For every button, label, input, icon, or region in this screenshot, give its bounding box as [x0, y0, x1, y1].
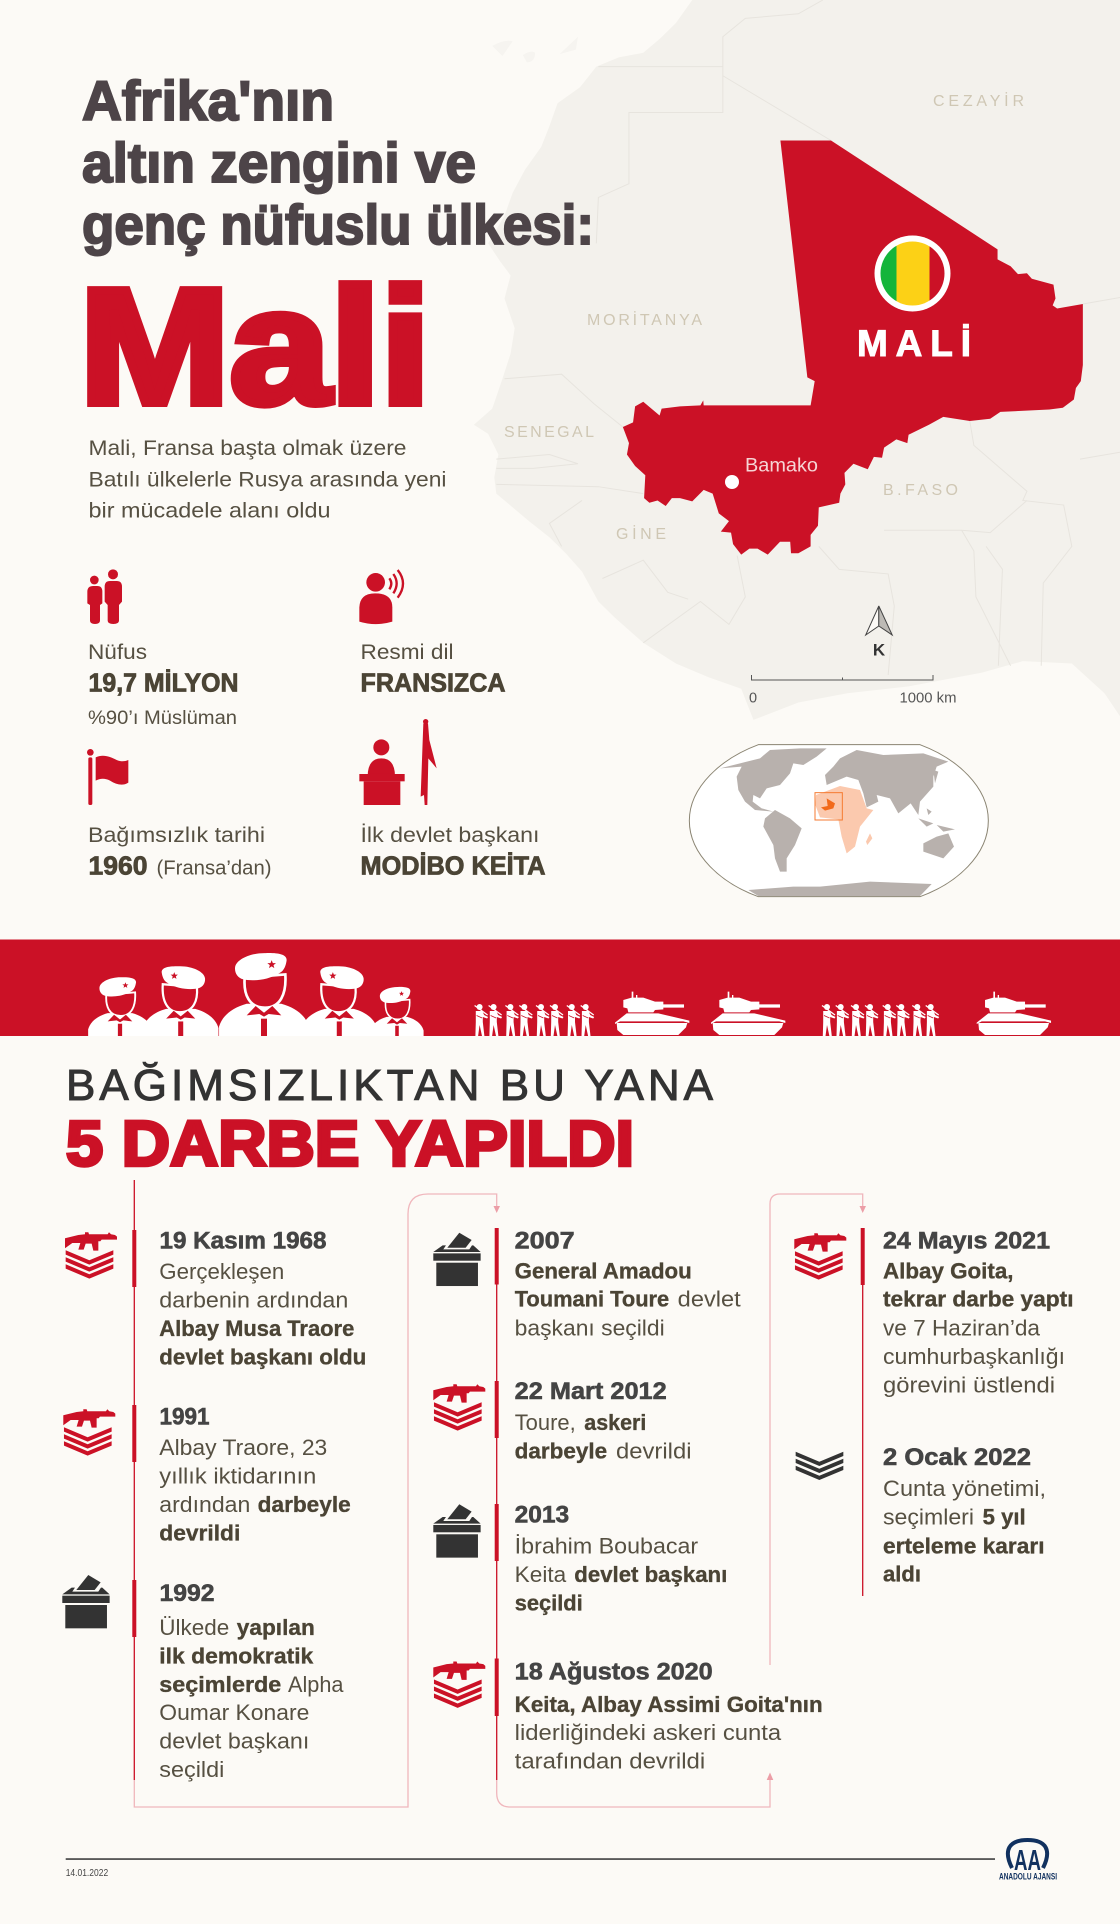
- column 1: event 1991: yıllık iktidarının: [159, 1464, 316, 1489]
- column 1: event 1991: Albay Traore, 23: [159, 1435, 327, 1460]
- column 2: event 2012: darbeyle: [515, 1438, 607, 1463]
- icon: chevrons: [796, 1452, 843, 1480]
- column 1: event 1992: Alpha: [288, 1672, 344, 1697]
- icon: ballot box: [433, 1233, 481, 1286]
- icon: coup: [63, 1409, 115, 1456]
- column 3: event 2022: Cunta yönetimi,: [883, 1476, 1046, 1501]
- column 3: event 2021: tekrar darbe yaptı: [883, 1287, 1074, 1312]
- stat: population: [88, 641, 238, 729]
- date: 14.01.2022: [66, 1867, 108, 1879]
- world locator map: [689, 745, 988, 897]
- column 3: event 2021: 24 Mayıs 2021: [883, 1227, 1050, 1254]
- column 2: event 2020: Keita, Albay Assimi Goita'nın: [515, 1692, 823, 1717]
- intro paragraph: bir mücadele alanı oldu: [88, 500, 330, 522]
- column 2: event 2012: [433, 1378, 692, 1463]
- stat: independence: [88, 824, 272, 880]
- icon: president at podium with flag: [359, 719, 437, 805]
- column 1: event 1992: seçildi: [159, 1757, 224, 1782]
- intro paragraph: Mali, Fransa başta olmak üzere: [88, 437, 406, 460]
- column 2: event 2020: [433, 1658, 823, 1773]
- column 1: event 1992: [62, 1575, 344, 1782]
- map labels: B.FASO: [883, 482, 958, 499]
- junta officers: [88, 953, 424, 1036]
- column 1: event 1992: Ülkede: [159, 1615, 229, 1640]
- icon: ballot box: [433, 1504, 481, 1558]
- title: subtitle lines: altın zengini ve: [82, 131, 476, 194]
- title: subtitle lines: Afrika'nın: [82, 69, 334, 132]
- column 3: event 2022: 2 Ocak 2022: [883, 1444, 1031, 1471]
- column 2: event 2013: İbrahim Boubacar: [515, 1533, 698, 1558]
- capital marker: Bamako: Bamako: [745, 454, 818, 476]
- column 3: event 2022: [796, 1444, 1046, 1587]
- column 2: event 2013: 2013: [515, 1501, 569, 1528]
- column 1: event 1968: [65, 1227, 366, 1369]
- icon: coup: [433, 1384, 485, 1431]
- logo: Anadolu Ajansi: ANADOLU AJANSI: [999, 1872, 1057, 1882]
- map: West Africa base: [474, 0, 1120, 720]
- map labels: SENEGAL: [504, 424, 594, 441]
- footer rule: [66, 1858, 995, 1860]
- map: Mali country shape: [623, 140, 1083, 555]
- column 1: event 1992: Oumar Konare: [159, 1700, 309, 1725]
- column 2: event 2020: 18 Ağustos 2020: [515, 1658, 713, 1685]
- column 1: event 1992: devlet başkanı: [159, 1729, 309, 1754]
- title: Mali: Mali: [80, 255, 430, 438]
- icon: Mali flag: [874, 236, 950, 312]
- tanks: [615, 992, 1051, 1035]
- logo: Anadolu Ajansi: [999, 1840, 1057, 1882]
- map labels: CEZAYİR: [933, 91, 1024, 110]
- stat: first president: İlk devlet başkanı: [360, 824, 540, 847]
- stat: official language: [360, 641, 506, 698]
- stat: independence: 1960: [88, 850, 148, 880]
- column 2: event 2007: Toumani Toure: [515, 1287, 669, 1312]
- column 3: event 2021: Albay Goita,: [883, 1258, 1014, 1283]
- intro paragraph: [88, 437, 446, 522]
- column 3: event 2022: 5 yıl: [983, 1505, 1026, 1530]
- column 3: event 2022: erteleme kararı: [883, 1533, 1044, 1558]
- stat: population: Nüfus: [88, 641, 147, 664]
- title: subtitle lines: [82, 69, 594, 256]
- stat: first president: [360, 824, 546, 880]
- stat: official language: Resmi dil: [360, 641, 454, 664]
- column 1: event 1992: ilk demokratik: [159, 1643, 314, 1668]
- stat: independence: (Fransa’dan): [156, 858, 272, 880]
- country label: MALİ: MALİ: [857, 323, 971, 364]
- icon: flag: [87, 749, 128, 805]
- title: subtitle lines: genç nüfuslu ülkesi:: [82, 193, 594, 256]
- column 3: event 2022: seçimleri: [883, 1505, 974, 1530]
- soldiers group 1: [475, 1004, 594, 1036]
- red banner: [0, 940, 1120, 1036]
- column 1: event 1992: 1992: [160, 1580, 214, 1607]
- column 2: event 2020: liderliğindeki askeri cunta: [515, 1720, 782, 1745]
- column 3: event 2021: [794, 1227, 1074, 1397]
- column 3: event 2021: görevini üstlendi: [883, 1372, 1055, 1397]
- column 1: event 1991: darbeyle: [258, 1492, 351, 1517]
- scale bar: 0: [749, 690, 757, 706]
- column 3: event 2022: aldı: [883, 1562, 921, 1587]
- column 2: event 2020: tarafından devrildi: [515, 1748, 705, 1773]
- column 1: event 1992: yapılan: [237, 1615, 315, 1640]
- icon: coup: [65, 1232, 117, 1279]
- capital marker: Bamako: [725, 454, 818, 489]
- column 1: event 1968: Albay Musa Traore: [159, 1316, 354, 1341]
- column 1: event 1992: seçimlerde: [159, 1672, 281, 1697]
- column 1: event 1991: [63, 1403, 351, 1545]
- column 2: event 2012: Toure,: [515, 1410, 576, 1435]
- column 3: event 2021: ve 7 Haziran’da: [883, 1315, 1041, 1340]
- icon: official language: [359, 570, 403, 624]
- stat: first president: MODİBO KEİTA: [360, 850, 546, 880]
- column 2: event 2013: Keita: [515, 1562, 567, 1587]
- column 1: event 1968: Gerçekleşen: [159, 1259, 284, 1284]
- soldiers group 2: [822, 1004, 939, 1036]
- map labels: MORİTANYA: [587, 310, 702, 329]
- scale bar: 1000 km: [900, 690, 956, 706]
- section heading: BAĞIMSIZLIKTAN BU YANA: [66, 1061, 714, 1110]
- icon: population: [87, 569, 122, 624]
- stat: population: %90’ı Müslüman: [88, 708, 237, 729]
- stat: official language: FRANSIZCA: [360, 668, 506, 698]
- north arrow: K: [873, 640, 886, 660]
- column 2: event 2013: seçildi: [515, 1590, 583, 1616]
- logo: Anadolu Ajansi: AA: [1014, 1845, 1041, 1877]
- column 1: event 1968: 19 Kasım 1968: [160, 1227, 326, 1254]
- timeline connectors: [134, 1180, 866, 1807]
- column 2: event 2012: 22 Mart 2012: [515, 1378, 667, 1405]
- column 1: event 1991: 1991: [160, 1403, 210, 1430]
- column 2: event 2013: [433, 1501, 727, 1616]
- column 2: event 2007: [433, 1227, 741, 1340]
- icon: ballot box: [62, 1575, 110, 1628]
- map labels: [504, 91, 1024, 543]
- column 2: event 2007: General Amadou: [515, 1258, 692, 1283]
- column 3: event 2021: cumhurbaşkanlığı: [883, 1344, 1065, 1369]
- section headline: 5 coups: 5 DARBE YAPILDI: [66, 1108, 634, 1180]
- column 2: event 2007: 2007: [515, 1227, 575, 1254]
- stat: population: 19,7 MİLYON: [88, 668, 238, 698]
- column 2: event 2007: devlet: [678, 1287, 741, 1312]
- stat: independence: Bağımsızlık tarihi: [88, 824, 265, 847]
- icon: coup: [433, 1662, 485, 1708]
- icon: coup: [794, 1233, 846, 1280]
- map labels: GİNE: [616, 524, 666, 543]
- column 2: event 2013: devlet başkanı: [574, 1562, 727, 1587]
- column 1: event 1991: ardından: [159, 1492, 250, 1517]
- column 1: event 1968: darbenin ardından: [159, 1288, 348, 1313]
- scale bar: [749, 675, 956, 706]
- north arrow: [866, 606, 892, 660]
- intro paragraph: Batılı ülkelerle Rusya arasında yeni: [88, 468, 446, 492]
- column 1: event 1991: devrildi: [159, 1520, 240, 1545]
- column 2: event 2012: askeri: [584, 1410, 646, 1435]
- column 2: event 2012: devrildi: [616, 1438, 692, 1463]
- column 2: event 2007: başkanı seçildi: [515, 1315, 665, 1340]
- column 1: event 1968: devlet başkanı oldu: [159, 1344, 366, 1369]
